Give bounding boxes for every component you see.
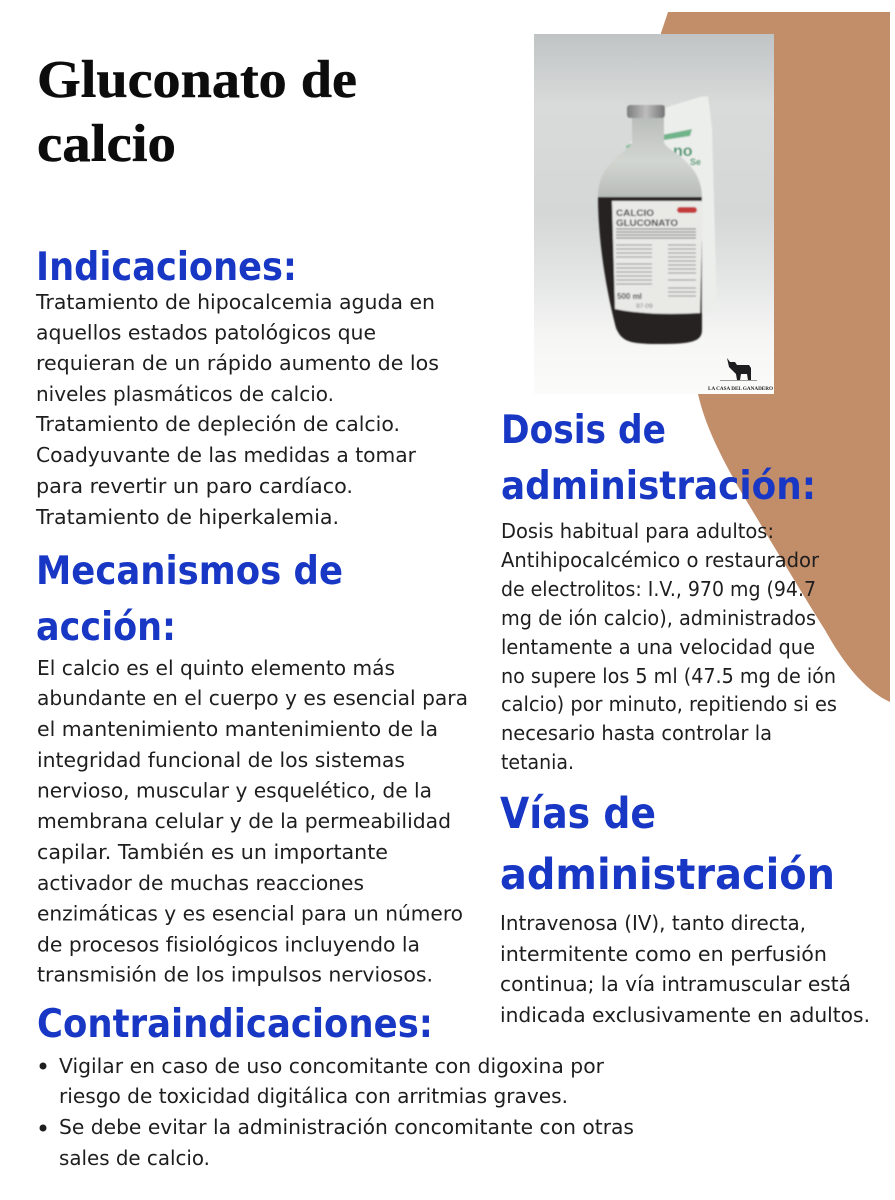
text block: Mecanismos de acción: enzimáticas y es esencial para un número bbox=[37, 902, 463, 926]
bottle label: GLUCONATO bbox=[616, 218, 678, 229]
text block: Dosis de administración: calcio) por minuto, repitiendo si es bbox=[501, 692, 837, 716]
bottle label: 500 ml bbox=[617, 292, 642, 301]
bullet list: Contraindicaciones: sales de calcio. bbox=[59, 1146, 210, 1170]
text block: Indicaciones: Tratamiento de hipocalcemia aguda en bbox=[35, 290, 435, 314]
text block: Mecanismos de acción bbox=[37, 656, 468, 986]
text block: Indicaciones: Coadyuvante de las medidas a tomar bbox=[36, 443, 417, 467]
text block: Vías de administración: continua; la vía intramuscular está bbox=[500, 972, 851, 996]
text block: Dosis de administración: mg de ión calcio), administrados bbox=[501, 606, 816, 630]
icon: bull logo: LA CASA DEL GANADERO bbox=[708, 386, 774, 392]
title: Gluconato de bbox=[37, 51, 357, 109]
text block: Indicaciones: niveles plasmáticos de calcio. bbox=[36, 382, 334, 406]
photo: calcium gluconate bottle bbox=[534, 34, 774, 394]
heading: Mecanismos de acción: Mecanismos de bbox=[36, 549, 343, 594]
bottle label bbox=[612, 201, 703, 314]
text block: Dosis de administración: Dosis habitual para adultos: bbox=[501, 519, 774, 543]
bullet list: Contraindicaciones: Se debe evitar la administración concomitante con otras bbox=[59, 1115, 634, 1139]
text block: Dosis de administración: Antihipocalcémico o restaurador bbox=[501, 548, 820, 572]
text block: Mecanismos de acción: abundante en el cuerpo y es esencial para bbox=[37, 686, 468, 710]
text block: Indicaciones: Tratamiento de depleción de calcio. bbox=[35, 412, 400, 436]
bullet list: Contraindicaciones: riesgo de toxicidad digitálica con arritmias graves. bbox=[59, 1084, 568, 1108]
text block: Indicaciones: requieran de un rápido aumento de los bbox=[36, 351, 439, 375]
text block: Dosis de administración bbox=[501, 519, 837, 774]
section: Indicaciones bbox=[35, 245, 439, 529]
sachet behind the bottle: no bbox=[673, 143, 693, 160]
bottle bbox=[598, 105, 702, 344]
text block: Indicaciones: Tratamiento de hiperkalemia. bbox=[35, 505, 339, 529]
text block: Mecanismos de acción: de procesos fisiológicos incluyendo la bbox=[37, 932, 420, 956]
heading: Vías de administración: administración bbox=[500, 850, 835, 900]
heading: Contraindicaciones: Contraindicaciones: bbox=[37, 1002, 433, 1047]
decorative brown shape bbox=[661, 12, 890, 702]
heading: Mecanismos de acción bbox=[36, 549, 343, 650]
heading: Dosis de administración: administración: bbox=[501, 464, 816, 509]
text block: Vías de administración: Intravenosa (IV), tanto directa, bbox=[500, 911, 806, 935]
text block: Mecanismos de acción: membrana celular y de la permeabilidad bbox=[37, 809, 451, 833]
heading: Dosis de administración: Dosis de bbox=[501, 408, 666, 453]
text block: Vías de administración: intermitente como en perfusión bbox=[500, 942, 827, 966]
bullet list: Contraindicaciones: Vigilar en caso de uso concomitante con digoxina por bbox=[59, 1054, 605, 1078]
text block: Indicaciones: aquellos estados patológicos que bbox=[36, 320, 376, 344]
text block: Mecanismos de acción: activador de muchas reacciones bbox=[37, 871, 364, 895]
bottle label: 97-09 bbox=[636, 303, 653, 310]
heading: Vías de administración: Vías de bbox=[500, 789, 656, 839]
section: Dosis de administración bbox=[501, 408, 837, 774]
text block: Indicaciones: para revertir un paro cardíaco. bbox=[36, 474, 353, 498]
section: Vías de administración bbox=[500, 789, 870, 1027]
text block: Vías de administración bbox=[500, 911, 870, 1027]
text block: Indicaciones bbox=[35, 290, 439, 529]
text block: Mecanismos de acción: El calcio es el quinto elemento más bbox=[37, 656, 395, 680]
text block: Dosis de administración: de electrolitos: I.V., 970 mg (94.7 bbox=[501, 577, 816, 601]
heading: Dosis de administración bbox=[501, 408, 816, 509]
sachet behind the bottle: Se bbox=[690, 157, 701, 167]
title: calcio bbox=[37, 115, 176, 173]
text block: Vías de administración: indicada exclusivamente en adultos. bbox=[500, 1003, 870, 1027]
text block: Dosis de administración: necesario hasta controlar la bbox=[501, 721, 772, 745]
heading: Indicaciones: Indicaciones: bbox=[36, 245, 297, 290]
text block: Mecanismos de acción: nervioso, muscular y esquelético, de la bbox=[37, 778, 432, 802]
bullet list: Contraindicaciones bbox=[40, 1054, 634, 1170]
section: Contraindicaciones bbox=[37, 1002, 634, 1170]
title bbox=[37, 51, 357, 173]
sachet behind the bottle bbox=[622, 96, 717, 313]
text block: Dosis de administración: tetania. bbox=[501, 750, 574, 774]
bottle label: CALCIO bbox=[616, 208, 654, 219]
section: Mecanismos de acción bbox=[36, 549, 468, 986]
text block: Mecanismos de acción: el mantenimiento mantenimiento de la bbox=[37, 717, 438, 741]
text block: Dosis de administración: lentamente a una velocidad que bbox=[501, 635, 815, 659]
heading: Vías de administración bbox=[500, 789, 835, 900]
icon: bull logo bbox=[708, 358, 774, 392]
text block: Dosis de administración: no supere los 5 ml (47.5 mg de ión bbox=[501, 664, 836, 688]
text block: Mecanismos de acción: integridad funcional de los sistemas bbox=[37, 748, 405, 772]
text block: Mecanismos de acción: capilar. También es un importante bbox=[37, 840, 388, 864]
text block: Mecanismos de acción: transmisión de los impulsos nerviosos. bbox=[37, 962, 433, 986]
heading: Mecanismos de acción: acción: bbox=[36, 605, 176, 650]
